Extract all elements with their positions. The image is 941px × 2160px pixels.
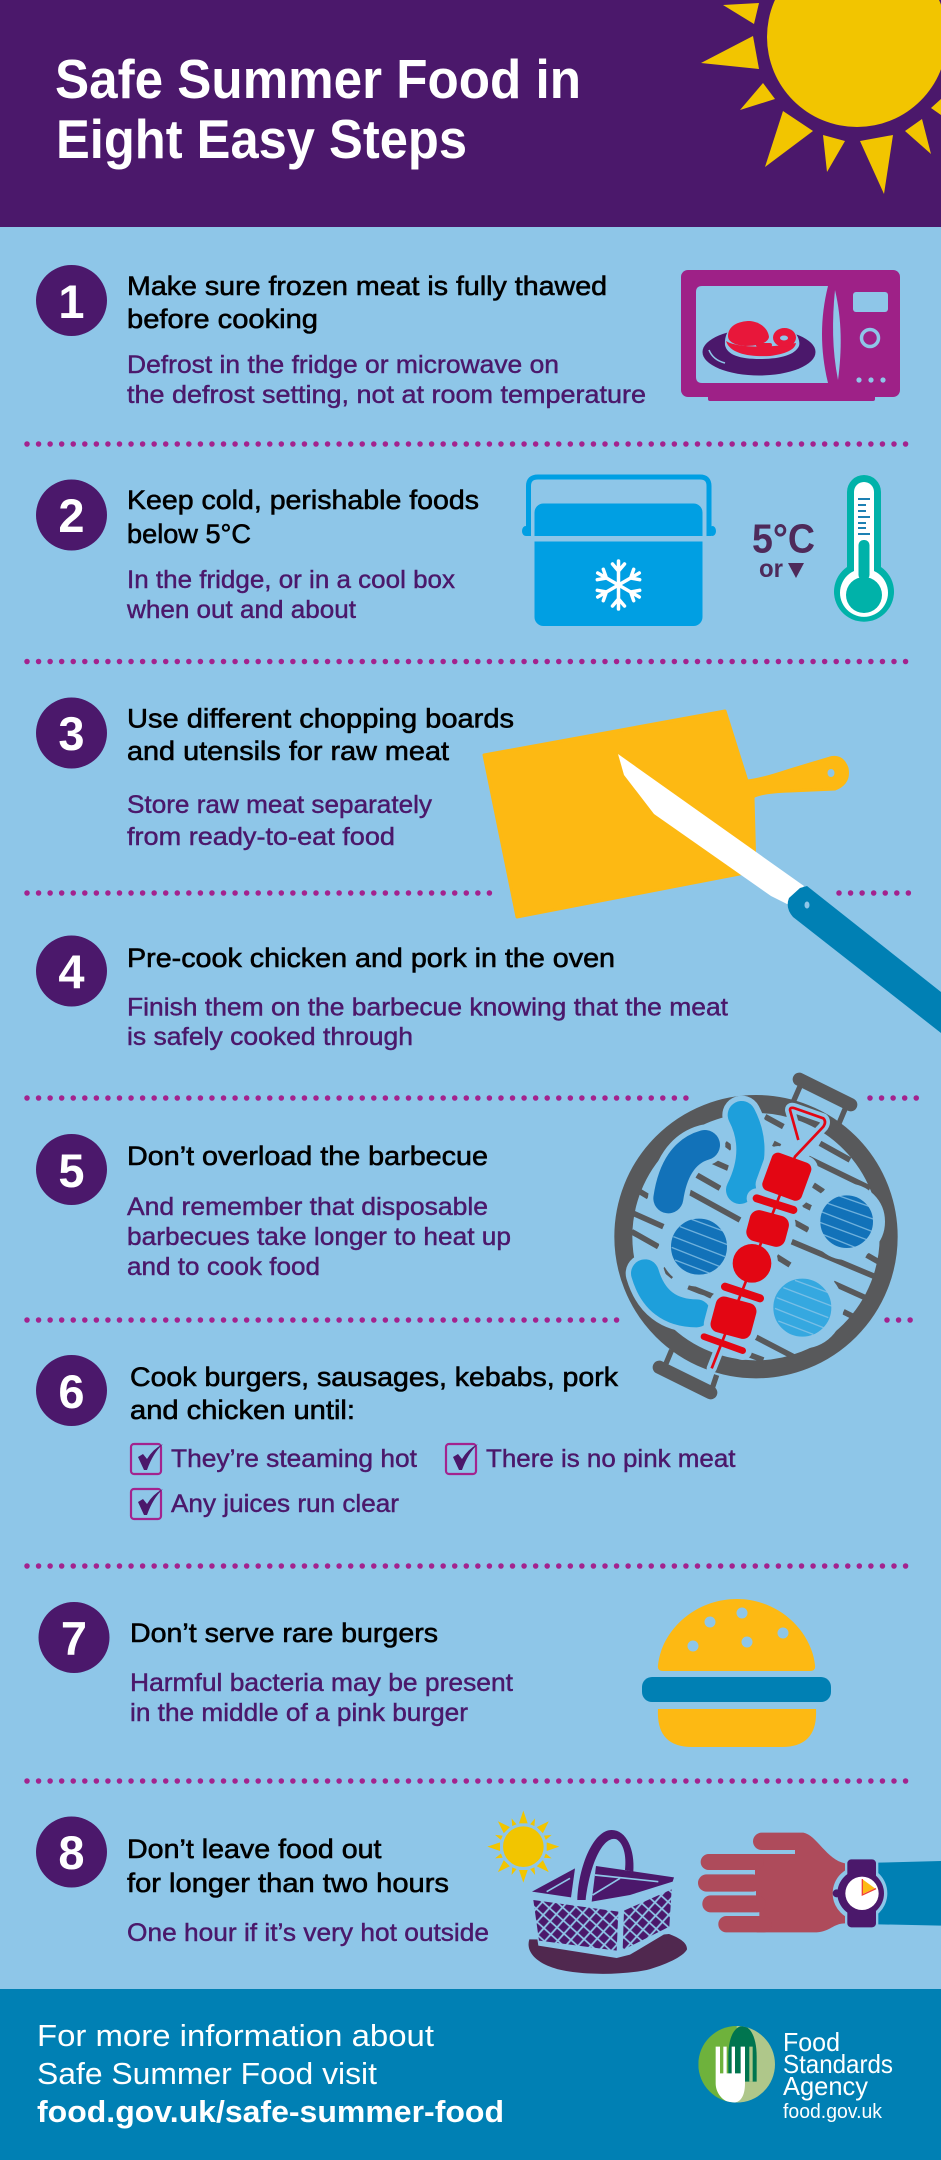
step 3 xyxy=(36,698,941,1033)
step 7 xyxy=(38,1599,831,1747)
hand xyxy=(698,1833,845,1932)
icon: cool box xyxy=(522,477,716,626)
step 8 heading: for longer than two hours xyxy=(127,1868,449,1898)
step 2 number: 2 xyxy=(58,489,85,542)
checklist item: steaming hot: They’re steaming hot xyxy=(171,1445,417,1473)
step 5 text: And remember that disposable xyxy=(127,1193,488,1221)
burger patties xyxy=(665,1189,879,1343)
step 2 text xyxy=(126,566,456,624)
icon: knife xyxy=(618,754,941,1033)
logo wordmark: Standards xyxy=(783,2049,893,2079)
icon: small sun xyxy=(487,1811,559,1883)
icon: chopping board xyxy=(484,711,848,917)
step 4 number: 4 xyxy=(58,945,85,998)
step 7 number xyxy=(38,1602,110,1673)
temperature label: 5°C xyxy=(752,516,815,562)
checklist item: no pink meat: There is no pink meat xyxy=(486,1445,736,1473)
step 4 number xyxy=(36,936,107,1006)
header banner xyxy=(0,0,941,227)
icon: burger xyxy=(642,1599,831,1747)
step 8 xyxy=(36,1811,941,1974)
step 1 xyxy=(36,265,900,409)
step 2 heading: Keep cold, perishable foods xyxy=(127,485,479,515)
icon: snowflake xyxy=(595,561,642,609)
title: Eight Easy Steps xyxy=(56,108,467,170)
checklist item: juices run clear: Any juices run clear xyxy=(171,1490,399,1518)
step 4 text: is safely cooked through xyxy=(127,1023,413,1051)
watch xyxy=(833,1859,887,1927)
sleeve xyxy=(878,1861,941,1926)
icon: barbecue xyxy=(623,1079,889,1393)
step 1 number: 1 xyxy=(58,275,85,328)
step 5 heading: Don’t overload the barbecue xyxy=(127,1141,488,1171)
step 8 text: One hour if it’s very hot outside xyxy=(127,1919,489,1947)
logo wordmark xyxy=(783,2027,893,2123)
Food Standards Agency logo xyxy=(698,2026,893,2123)
step 1 text: the defrost setting, not at room temperature xyxy=(127,381,646,409)
checklist xyxy=(131,1444,736,1519)
logo wordmark: Food xyxy=(783,2027,840,2057)
footer text: Safe Summer Food visit xyxy=(37,2056,377,2091)
icon: picnic basket xyxy=(529,1830,687,1974)
step 8 heading: Don’t leave food out xyxy=(127,1834,382,1864)
step 4 text xyxy=(127,994,728,1051)
step 6 number: 6 xyxy=(58,1365,85,1418)
step 6 heading: Cook burgers, sausages, kebabs, pork xyxy=(130,1362,619,1392)
footer xyxy=(0,1989,941,2160)
step 8 heading xyxy=(127,1834,449,1898)
icon: hand with watch xyxy=(698,1833,941,1932)
step 2 number xyxy=(36,480,107,550)
step 4 xyxy=(36,936,728,1051)
step 7 text: Harmful bacteria may be present xyxy=(130,1669,513,1697)
step 1 text xyxy=(127,351,646,409)
icon: microwave with steak xyxy=(681,270,900,401)
step 6 heading xyxy=(130,1362,619,1425)
step 2 heading: below 5°C xyxy=(127,519,251,549)
kebab xyxy=(704,1108,825,1368)
step 1 number xyxy=(36,265,107,336)
step 6 heading: and chicken until: xyxy=(130,1395,355,1425)
step 7 text xyxy=(130,1669,513,1727)
step 5 number xyxy=(36,1134,107,1205)
step 1 text: Defrost in the fridge or microwave on xyxy=(127,351,559,379)
footer text: For more information about xyxy=(37,2018,434,2053)
step 5 text: and to cook food xyxy=(127,1253,320,1281)
logo wordmark: Agency xyxy=(783,2071,868,2101)
step 4 text: Finish them on the barbecue knowing that the meat xyxy=(127,994,728,1022)
step 1 heading xyxy=(127,271,607,334)
step 5 text: barbecues take longer to heat up xyxy=(127,1223,511,1251)
step 5 xyxy=(36,1079,889,1393)
step 3 number: 3 xyxy=(58,707,85,760)
step 7 number: 7 xyxy=(61,1612,87,1665)
sausages xyxy=(645,1115,750,1313)
step 3 heading: Use different chopping boards xyxy=(127,704,514,734)
title xyxy=(55,48,581,170)
step 7 heading: Don’t serve rare burgers xyxy=(130,1618,438,1648)
step 2 xyxy=(36,475,894,626)
logo mark xyxy=(698,2026,775,2103)
step 5 text xyxy=(127,1193,511,1281)
icon: thermometer xyxy=(834,475,894,622)
step 3 text: Store raw meat separately xyxy=(127,791,433,819)
step 2 text: when out and about xyxy=(126,596,356,624)
step 3 text xyxy=(127,791,433,851)
step 3 heading: and utensils for raw meat xyxy=(127,736,450,766)
temperature label xyxy=(752,516,815,583)
step 5 number: 5 xyxy=(58,1144,85,1197)
step 4 heading: Pre-cook chicken and pork in the oven xyxy=(127,943,615,973)
step 2 text: In the fridge, or in a cool box xyxy=(127,566,456,594)
footer text: food.gov.uk/safe-summer-food xyxy=(37,2094,504,2129)
step 6 number xyxy=(36,1355,107,1426)
step 2 heading xyxy=(127,485,479,549)
icon: sun xyxy=(701,0,941,194)
step 3 number xyxy=(36,698,107,768)
step 8 number: 8 xyxy=(58,1826,85,1879)
step 1 heading: before cooking xyxy=(127,304,318,334)
title: Safe Summer Food in xyxy=(55,48,581,110)
step 8 number xyxy=(36,1816,107,1888)
step 7 text: in the middle of a pink burger xyxy=(130,1699,468,1727)
step 3 heading xyxy=(127,704,514,766)
logo wordmark: food.gov.uk xyxy=(783,2101,883,2123)
step 3 text: from ready-to-eat food xyxy=(127,823,395,851)
step 1 heading: Make sure frozen meat is fully thawed xyxy=(127,271,607,301)
footer text xyxy=(37,2018,504,2129)
temperature label: or xyxy=(759,555,783,583)
step 6 xyxy=(36,1355,736,1519)
